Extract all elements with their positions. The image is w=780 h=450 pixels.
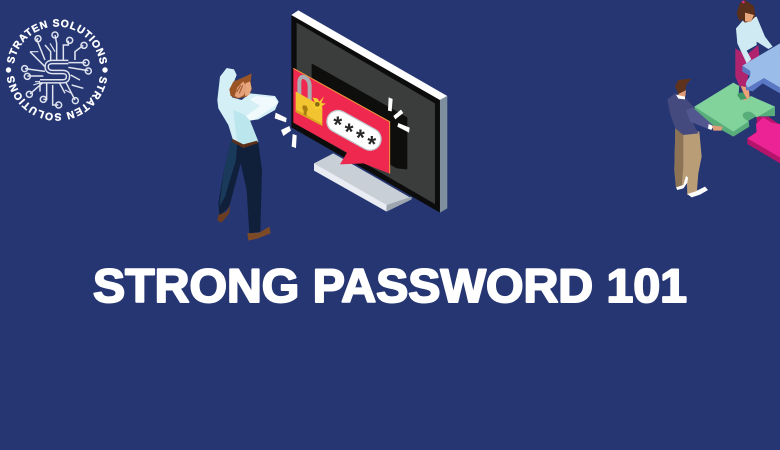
shirt and arms [217, 68, 279, 146]
icon: open padlock [296, 77, 326, 126]
monitor stand [314, 153, 412, 212]
woman [735, 0, 773, 103]
head and hair [678, 90, 686, 97]
head and hair [229, 73, 252, 99]
password field: * [333, 112, 342, 138]
illustration: frustrated man and monitor [217, 10, 447, 241]
password alert bubble [293, 68, 390, 174]
blue puzzle piece [742, 43, 780, 93]
password field: * [356, 125, 365, 151]
logo ring text: STRATEN SOLUTIONS [7, 19, 107, 64]
shoes [217, 205, 230, 223]
shoes [687, 187, 708, 197]
sweater and arm [667, 93, 698, 135]
logo: Straten Solutions [6, 19, 108, 121]
password field: * [367, 131, 376, 157]
logo ring text [7, 19, 107, 121]
logo ring text: STRATEN SOLUTIONS [7, 76, 107, 121]
man [667, 79, 723, 197]
title: STRONG PASSWORD 101 [93, 259, 687, 312]
logo circuit S mark [22, 32, 91, 108]
password field: * [345, 118, 354, 144]
pink puzzle piece [747, 117, 780, 163]
alert rays near monitor [275, 97, 410, 148]
illustration: team assembling puzzle [667, 0, 780, 197]
trousers [674, 128, 702, 195]
green puzzle piece [694, 83, 775, 137]
man [217, 68, 279, 241]
trousers [218, 138, 262, 233]
password field [323, 106, 385, 157]
monitor [291, 10, 447, 213]
